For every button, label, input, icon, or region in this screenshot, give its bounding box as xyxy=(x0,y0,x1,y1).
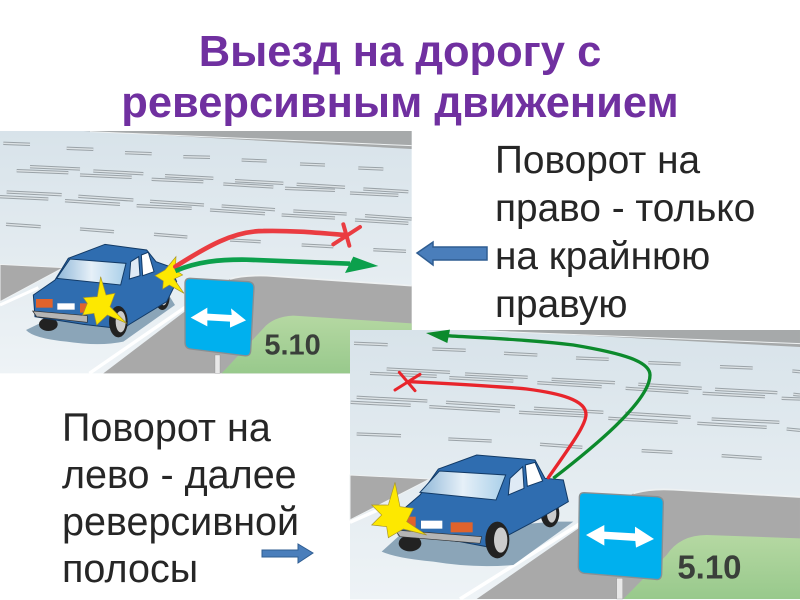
icon: rear star xyxy=(372,482,427,538)
arrow: blue pointing left xyxy=(417,242,487,265)
text block: left turn xyxy=(62,406,299,591)
lane markings xyxy=(0,143,412,251)
arrow: blue pointing right xyxy=(262,544,313,563)
lawn xyxy=(222,316,412,373)
text block: right turn xyxy=(495,139,755,326)
arrow: red forbidden path xyxy=(175,224,360,267)
car xyxy=(26,244,177,344)
roadside left xyxy=(350,475,430,520)
lane markings xyxy=(351,343,800,458)
label: 5.10: 5.10 xyxy=(677,548,742,585)
text block: right turn: правую xyxy=(495,283,627,326)
title: реверсивным движением xyxy=(121,79,679,127)
arrow: green allowed path xyxy=(175,257,378,273)
text block: right turn: Поворот на xyxy=(495,139,700,182)
roadside right xyxy=(477,489,800,599)
text block: right turn: на крайнюю xyxy=(495,235,710,278)
title: Выезд на дорогу с xyxy=(199,28,601,76)
far road edge xyxy=(83,131,412,149)
roadside left xyxy=(0,264,63,302)
car xyxy=(382,455,573,566)
title xyxy=(121,28,679,127)
icon: side star xyxy=(155,257,184,293)
icon: sign 5.10 xyxy=(578,493,663,599)
text block: left turn: лево - далее xyxy=(62,453,297,497)
arrow: red forbidden path xyxy=(395,372,586,478)
roadside right xyxy=(103,276,412,373)
far road edge xyxy=(480,330,800,347)
arrow: green allowed path xyxy=(426,330,650,478)
icon: sign 5.10 xyxy=(185,278,254,373)
lawn xyxy=(623,535,800,599)
text block: right turn: право - только xyxy=(495,187,755,230)
panel: right turn illustration xyxy=(0,131,412,373)
label: 5.10: 5.10 xyxy=(264,329,321,361)
panel: left turn illustration xyxy=(350,330,800,599)
text block: left turn: полосы xyxy=(62,547,198,591)
text block: left turn: Поворот на xyxy=(62,406,271,450)
icon: rear star xyxy=(83,277,127,325)
text block: left turn: реверсивной xyxy=(62,500,299,544)
